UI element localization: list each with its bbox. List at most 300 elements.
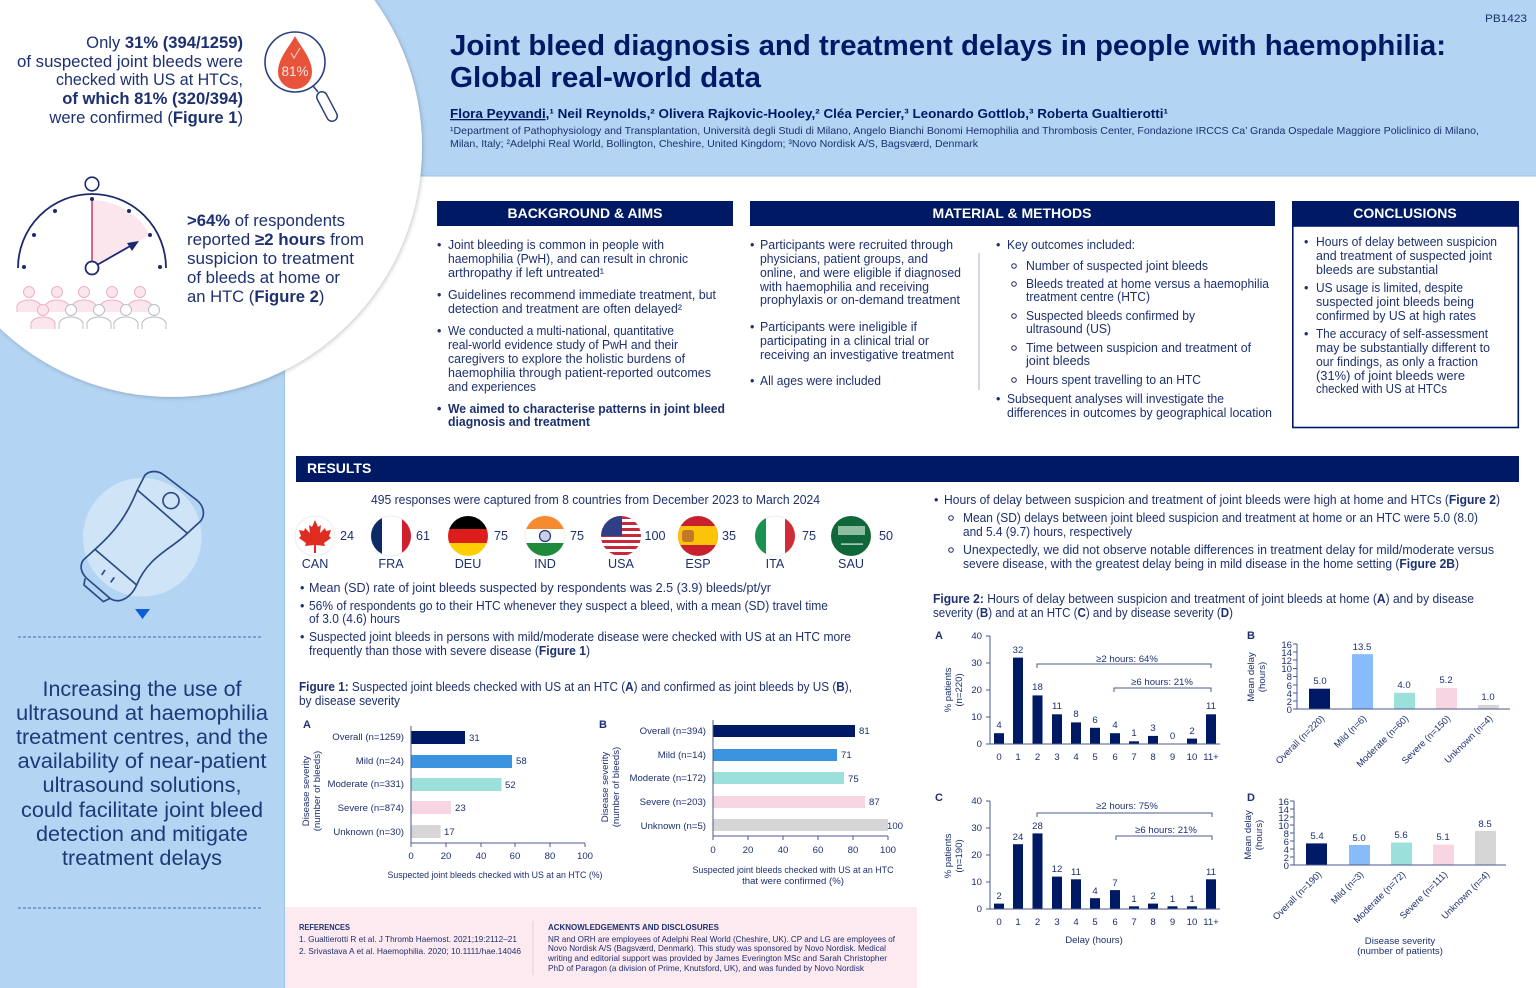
chart: figure 2C histogram: 12 — [1052, 864, 1062, 875]
chart: figure 2A histogram: 11 — [1206, 701, 1216, 712]
chart: figure 2B mean delay: Severe (n=150) — [1400, 713, 1452, 766]
bullet list: • — [437, 288, 441, 302]
chart: figure 2B mean delay: 4 — [1287, 689, 1293, 700]
chart: figure 2C histogram: 5 — [1092, 917, 1098, 928]
text: delay finding: of bleeds at home or — [187, 268, 340, 287]
conclusion bullets: Hours of delay between suspicion — [1316, 235, 1497, 249]
panel: left blue sidebar — [0, 0, 285, 988]
text: right column results bullets: • — [934, 493, 938, 507]
conclusion bullets: bleeds are substantial — [1316, 263, 1438, 277]
chart: figure 2B mean delay: B — [1247, 630, 1255, 642]
outcomes list: • — [996, 392, 1000, 406]
chart: figure 1B bars — [599, 719, 903, 887]
results bullets: Mean (SD) rate of joint bleeds suspected by respondents was 2.5 (3.9) bleeds/pt/yr — [309, 581, 771, 595]
chart: figure 2C histogram: 10 — [1187, 917, 1197, 928]
chart: figure 1B bars: Disease severity — [600, 752, 611, 822]
outcomes list: Number of suspected joint bleeds — [1026, 259, 1208, 273]
bracket: at least 6 hours — [1114, 677, 1211, 692]
chart: figure 2C histogram: (n=190) — [954, 839, 965, 873]
chart: figure 1B bars: that were confirmed (%) — [742, 876, 844, 887]
results bullets: Suspected joint bleeds in persons with mild/moderate disease were checked with US at an HTC more — [309, 630, 851, 644]
chart: figure 2A histogram: 18 — [1032, 682, 1043, 693]
chart: figure 2C histogram: 8 — [1150, 917, 1156, 928]
text: right column results bullets: and 5.4 (9.7) hours, respectively — [963, 525, 1133, 539]
text: delay finding: >64% of respondents — [187, 211, 345, 230]
conclusion bullets: • — [1304, 235, 1308, 249]
outcomes list: differences in outcomes by geographical location — [1007, 406, 1272, 420]
chart: figure 2B mean delay: (hours) — [1257, 662, 1268, 692]
heading: MATERIAL & METHODS — [933, 205, 1091, 221]
chart: figure 2C histogram: 11 — [1071, 867, 1081, 878]
chart: figure 1B bars: 80 — [848, 845, 858, 856]
chart: figure 2B mean delay: Overall (n=220) — [1274, 713, 1326, 766]
figure 2 — [933, 592, 1510, 957]
outcomes list: joint bleeds — [1025, 354, 1090, 368]
chart: figure 2B mean delay: Moderate (n=60) — [1355, 713, 1410, 769]
flag: USA — [601, 516, 666, 571]
chart: figure 2D mean delay: 14 — [1278, 805, 1290, 816]
icon: clock dial — [18, 177, 166, 274]
results bullets: 56% of respondents go to their HTC whenever they suspect a bleed, with a mean (SD) travel time — [309, 599, 828, 613]
chart: figure 1A bars: 80 — [545, 851, 555, 862]
acknowledgements: ACKNOWLEDGEMENTS AND DISCLOSURES — [548, 922, 719, 932]
results bullets: • — [300, 630, 304, 644]
chart: figure 2D mean delay: Mean delay — [1243, 810, 1254, 860]
icon: magnifier with blood drop — [265, 32, 332, 116]
chart: figure 1B bars: 60 — [813, 845, 823, 856]
participants list: with haemophilia and receiving — [759, 280, 929, 294]
chart: figure 1B bars: 40 — [778, 845, 788, 856]
chart: figure 1A bars: Disease severity — [301, 756, 312, 826]
panel: header banner — [285, 0, 1536, 176]
chart: figure 2B mean delay: 14 — [1281, 648, 1293, 659]
chart: figure 2C histogram: Delay (hours) — [1065, 935, 1123, 946]
conclusion bullets: and treatment of suspected joint — [1316, 249, 1492, 263]
text: ultrasound call to action — [16, 677, 268, 870]
chart: figure 2B mean delay: 2 — [1287, 697, 1292, 708]
chart: figure 2B mean delay: 1.0 — [1481, 692, 1495, 703]
caption — [299, 680, 852, 708]
chart: figure 1B bars: 100 — [887, 821, 903, 832]
title: Joint bleed diagnosis and treatment delays in people with haemophilia: — [450, 30, 1446, 62]
chart: figure 1A bars: A — [303, 719, 311, 731]
chart: figure 2B mean delay: 12 — [1281, 656, 1292, 667]
caption — [933, 592, 1474, 620]
chart: figure 1B bars: 87 — [869, 797, 880, 808]
text: delay finding: suspicion to treatment — [187, 249, 354, 268]
icon: group of people, two thirds highlighted — [17, 286, 166, 329]
chart: figure 2B mean delay: Mild (n=6) — [1332, 713, 1368, 750]
chart: figure 2C histogram: 2 — [1035, 917, 1040, 928]
flag: Saudi Arabia — [831, 516, 893, 571]
flag: Saudi Arabia: SAU — [838, 557, 864, 571]
title: Global real-world data — [450, 62, 762, 94]
chart: figure 2A histogram: 8 — [1150, 752, 1156, 763]
bracket: at least 6 hours — [1116, 825, 1212, 840]
chart: figure 2A histogram: 0 — [977, 739, 982, 750]
acknowledgements: PhD of Paragon (a division of Prime, Knutsford, UK), and was funded by Novo Nordisk — [548, 963, 865, 973]
chart: figure 2A histogram: A — [935, 630, 943, 642]
chart: figure 2C histogram: 1 — [1170, 894, 1175, 905]
outcomes list: Key outcomes included: — [1007, 238, 1135, 252]
bullet list: arthropathy if left untreated¹ — [448, 266, 604, 280]
chart: figure 1B bars: Severe (n=203) — [640, 797, 706, 808]
title — [450, 30, 1446, 94]
flag: Germany — [448, 516, 508, 571]
chart: figure 1B bars: Suspected joint bleeds checked with US at an HTC — [692, 865, 894, 876]
flag: India: 75 — [570, 529, 584, 543]
chart: figure 2D mean delay: Mild (n=3) — [1329, 869, 1365, 906]
text: ultrasound call to action: treatment centres, and the — [16, 725, 268, 749]
participants list: prophylaxis or on-demand treatment — [760, 293, 960, 307]
chart: figure 2B mean delay: 6 — [1287, 681, 1292, 692]
bullet list: • — [437, 324, 441, 338]
chart: figure 2C histogram: 20 — [971, 850, 982, 861]
bullet list: Guidelines recommend immediate treatment, but — [448, 288, 716, 302]
flag: Canada: 24 — [340, 529, 354, 543]
chart: figure 2A histogram: 2 — [1189, 726, 1195, 737]
text: ultrasound finding: of which 81% (320/394) — [62, 89, 243, 108]
bullet list: caregivers to explore the holistic burdens of — [448, 352, 685, 366]
chart: figure 2A histogram: 8 — [1073, 709, 1079, 720]
flag: France — [371, 516, 430, 571]
chart: figure 2C histogram: 10 — [971, 877, 982, 888]
chart: figure 2A histogram: 4 — [996, 720, 1002, 731]
chart: figure 1B bars: 100 — [880, 845, 896, 856]
bullet list: We conducted a multi-national, quantitative — [448, 324, 674, 338]
participants list: receiving an investigative treatment — [760, 348, 954, 362]
chart: figure 1B bars: (number of bleeds) — [611, 747, 622, 827]
chart: figure 1A bars: Suspected joint bleeds checked with US at an HTC (%) — [388, 870, 602, 881]
icon: downward arrow — [135, 609, 150, 619]
chart: figure 1A bars: Unknown (n=30) — [333, 827, 404, 838]
flag: Italy — [755, 516, 816, 571]
chart: figure 2A histogram: 3 — [1150, 723, 1156, 734]
chart: figure 2D mean delay: 8 — [1284, 829, 1289, 840]
chart: figure 2A histogram: 0 — [1170, 731, 1175, 742]
flag: USA: USA — [608, 557, 635, 571]
chart: figure 1B bars: Moderate (n=172) — [629, 773, 706, 784]
chart: figure 1B bars: 75 — [848, 774, 859, 785]
bracket: at least 2 hours: ≥2 hours: 75% — [1096, 801, 1158, 812]
chart: figure 2A histogram: 7 — [1131, 752, 1137, 763]
chart: figure 1A bars: 52 — [505, 780, 516, 791]
icon: ultrasound probe — [81, 471, 203, 602]
panel: material and methods — [750, 201, 1275, 420]
acknowledgements: writing and editorial support was provided by James Everington MSc and Sarah Christopher — [547, 953, 887, 963]
chart: figure 2D mean delay: 12 — [1278, 813, 1289, 824]
chart: figure 2D mean delay: Severe (n=111) — [1398, 869, 1449, 921]
results bullets: • — [300, 599, 304, 613]
participants list: Participants were recruited through — [760, 238, 953, 252]
chart: figure 1B bars: 81 — [859, 726, 870, 737]
text: right column results bullets — [934, 493, 1500, 571]
text: ultrasound finding: of suspected joint bleeds were — [17, 52, 243, 71]
chart: figure 2A histogram: 1 — [1131, 728, 1137, 739]
bracket: at least 2 hours — [1037, 801, 1212, 817]
chart: figure 2B mean delay: 16 — [1281, 640, 1292, 651]
outcomes list: Suspected bleeds confirmed by — [1026, 309, 1196, 323]
chart: figure 2C histogram: 3 — [1054, 917, 1060, 928]
chart: figure 2C histogram: 9 — [1170, 917, 1175, 928]
chart: figure 2A histogram: (n=220) — [954, 673, 965, 707]
references — [299, 922, 521, 956]
caption: Figure 2: Hours of delay between suspicion and treatment of joint bleeds at home (A) and by disease — [933, 592, 1474, 606]
panel: references and acknowledgements — [285, 907, 917, 988]
chart: figure 2C histogram: 1 — [1015, 917, 1021, 928]
caption: severity (B) and at an HTC (C) and by disease severity (D) — [933, 606, 1233, 620]
chart: figure 2A histogram: 9 — [1170, 752, 1175, 763]
chart: figure 2C histogram: 11+ — [1203, 917, 1219, 928]
bullet list: and experiences — [448, 380, 536, 394]
bullet list: detection and treatment are often delayed² — [448, 302, 682, 316]
chart: figure 2A histogram: % patients — [943, 667, 954, 712]
chart: figure 1A bars — [301, 719, 602, 881]
chart: figure 2D mean delay: 16 — [1278, 797, 1289, 808]
chart: figure 2A histogram: 11 — [1052, 701, 1062, 712]
chart: figure 1A bars: 17 — [444, 827, 455, 838]
text: ultrasound call to action: ultrasound at haemophilia — [16, 701, 268, 725]
chart: figure 2A histogram: 10 — [1187, 752, 1197, 763]
chart: figure 1A bars: Severe (n=874) — [338, 803, 404, 814]
heading: BACKGROUND & AIMS — [507, 205, 663, 221]
heading: CONCLUSIONS — [1353, 205, 1457, 221]
chart: figure 2D mean delay: (number of patients) — [1357, 946, 1443, 957]
chart: figure 2A histogram: 30 — [971, 658, 982, 669]
flag: Italy: 75 — [802, 529, 816, 543]
participants list: • — [750, 320, 754, 334]
conclusion bullets: checked with US at HTCs — [1316, 382, 1447, 396]
results heading: RESULTS — [307, 460, 371, 476]
chart: figure 2A histogram: 3 — [1054, 752, 1060, 763]
bullet list: haemophilia (PwH), and can result in chronic — [448, 252, 688, 266]
outcomes list: Bleeds treated at home versus a haemophilia — [1026, 277, 1269, 291]
outcomes list: treatment centre (HTC) — [1026, 290, 1150, 304]
chart: figure 2C histogram: 2 — [1150, 891, 1156, 902]
flag: France: FRA — [378, 557, 404, 571]
panel: response summary and country flags — [295, 493, 893, 658]
outcomes list: ultrasound (US) — [1026, 322, 1111, 336]
text: ultrasound finding: checked with US at HTCs, — [56, 70, 243, 89]
flag: Spain: 35 — [722, 529, 736, 543]
participants list: online, and were eligible if diagnosed — [760, 266, 961, 280]
conclusion bullets: suspected joint bleeds being — [1316, 295, 1474, 309]
acknowledgements: NR and ORH are employees of Adelphi Real World (Cheshire, UK). CP and LG are employees of — [548, 934, 896, 944]
chart: figure 2C histogram: 7 — [1131, 917, 1137, 928]
bullet list: We aimed to characterise patterns in joint bleed — [448, 402, 725, 416]
chart: figure 2A histogram: 32 — [1013, 645, 1023, 656]
icon: magnifier with blood drop: 81% — [281, 64, 309, 79]
text: ultrasound call to action: could facilitate joint bleed — [21, 798, 263, 822]
chart: figure 2C histogram: 4 — [1092, 886, 1098, 897]
chart: figure 1A bars: 0 — [408, 851, 414, 862]
chart: figure 2C histogram: 6 — [1112, 917, 1118, 928]
outcomes list — [996, 238, 1272, 420]
chart: figure 2A histogram: 5 — [1092, 752, 1098, 763]
chart: figure 1B bars: 20 — [743, 845, 753, 856]
chart: figure 2C histogram — [935, 792, 1220, 946]
chart: figure 2C histogram: 1 — [1131, 894, 1137, 905]
bullet list: haemophilia through patient-reported outcomes — [448, 366, 711, 380]
affiliations — [450, 126, 1479, 150]
bracket: at least 6 hours: ≥6 hours: 21% — [1135, 825, 1197, 836]
chart: figure 2C histogram: 30 — [971, 823, 982, 834]
text: delay finding — [187, 211, 364, 306]
chart: figure 2C histogram: 7 — [1112, 878, 1118, 889]
flag: Germany: DEU — [455, 557, 481, 571]
chart: figure 1A bars: 23 — [455, 803, 466, 814]
chart: figure 2D mean delay: 4 — [1284, 845, 1290, 856]
chart: figure 2D mean delay: 2 — [1284, 853, 1289, 864]
chart: figure 2C histogram: 2 — [996, 891, 1002, 902]
conclusion bullets: (31%) of joint bleeds were — [1316, 369, 1465, 383]
chart: figure 1A bars: Mild (n=24) — [356, 756, 404, 767]
chart: figure 1B bars: 0 — [710, 845, 716, 856]
chart: figure 2C histogram: % patients — [943, 833, 954, 878]
chart: figure 2B mean delay: 5.0 — [1313, 676, 1327, 687]
chart: figure 1B bars: Mild (n=14) — [658, 750, 706, 761]
chart: figure 2C histogram: 0 — [977, 904, 982, 915]
chart: figure 2A histogram: 20 — [971, 685, 982, 696]
chart: figure 2D mean delay — [1243, 792, 1506, 957]
affiliations: ¹Department of Pathophysiology and Transplantation, Università degli Studi di Milano, Angelo Bianchi Bonomi Hemophilia and Thrombosis Center, Fondazione IRCCS Ca’ Granda Ospedale Maggiore Policlinico di Milano, — [450, 126, 1479, 137]
outcomes list: Subsequent analyses will investigate the — [1007, 392, 1224, 406]
chart: figure 2D mean delay: (hours) — [1254, 820, 1265, 850]
flag: Italy: ITA — [766, 557, 785, 571]
references: REFERENCES — [299, 922, 350, 932]
chart: figure 2D mean delay: 5.6 — [1394, 830, 1408, 841]
chart: figure 2D mean delay: 5.0 — [1352, 833, 1366, 844]
participants list: Participants were ineligible if — [760, 320, 917, 334]
bracket: at least 2 hours: ≥2 hours: 64% — [1096, 654, 1158, 665]
flag: Germany: 75 — [494, 529, 508, 543]
bullet list: • — [437, 402, 441, 416]
chart: figure 2C histogram: C — [935, 792, 943, 804]
chart: figure 2B mean delay: 4.0 — [1397, 680, 1411, 691]
chart: figure 2C histogram: 11 — [1206, 867, 1216, 878]
chart: figure 1A bars: 100 — [577, 851, 593, 862]
chart: figure 2D mean delay: Unknown (n=4) — [1440, 869, 1491, 921]
conclusion bullets: confirmed by US at high rates — [1316, 309, 1476, 323]
text: delay finding: an HTC (Figure 2) — [187, 287, 324, 306]
panel: background and aims — [437, 201, 733, 429]
bracket: at least 2 hours — [1037, 654, 1211, 668]
text: right column results bullets: Mean (SD) delays between joint bleed suspicion and treatment at home or an HTC were 5.0 (8.0) — [963, 511, 1478, 525]
panel: white key findings circle — [0, 0, 422, 397]
bullet list: • — [437, 238, 441, 252]
chart: figure 1A bars: 58 — [516, 756, 527, 767]
text: ultrasound call to action: detection and mitigate — [36, 822, 248, 846]
chart: figure 2C histogram: 1 — [1189, 894, 1195, 905]
affiliations: Milan, Italy; ²Adelphi Real World, Bollington, Cheshire, United Kingdom; ³Novo Nordisk A/S, Bagsværd, Denmark — [450, 139, 979, 150]
flag: Spain: ESP — [685, 557, 711, 571]
text: ultrasound finding: Only 31% (394/1259) — [86, 33, 243, 52]
conclusion bullets: our findings, as only a fraction — [1316, 355, 1478, 369]
chart: figure 2D mean delay: Overall (n=190) — [1271, 869, 1323, 922]
chart: figure 2A histogram — [935, 630, 1220, 763]
acknowledgements — [547, 922, 896, 973]
chart: figure 2C histogram: 24 — [1013, 832, 1024, 843]
chart: figure 2D mean delay: 10 — [1278, 821, 1289, 832]
text: ultrasound call to action: availability of near-patient — [18, 749, 267, 773]
conclusion bullets: • — [1304, 281, 1308, 295]
panel: conclusions — [1292, 201, 1519, 428]
flag: India — [525, 516, 584, 571]
text: right column results bullets: Unexpectedly, we did not observe notable differences in treatment delay for mild/moderate versus — [963, 543, 1494, 557]
participants list: All ages were included — [760, 374, 881, 388]
chart: figure 2A histogram: 6 — [1092, 715, 1098, 726]
chart: figure 1A bars: 40 — [476, 851, 486, 862]
heading — [750, 201, 1275, 226]
caption: by disease severity — [299, 694, 401, 708]
participants list: • — [750, 374, 754, 388]
chart: figure 2B mean delay: 10 — [1281, 664, 1292, 675]
heading — [437, 201, 733, 226]
references: 2. Srivastava A et al. Haemophilia. 2020; 10.1111/hae.14046 — [299, 946, 521, 956]
references: 1. Gualtierotti R et al. J Thromb Haemost. 2021;19:2112–21 — [299, 934, 517, 944]
flag: France: 61 — [416, 529, 430, 543]
chart: figure 1B bars: B — [599, 719, 607, 731]
chart: figure 1B bars: 71 — [841, 750, 852, 761]
bullet list: real-world evidence study of PwH and their — [448, 338, 678, 352]
heading — [1292, 201, 1519, 226]
poster code: PB1423 — [1485, 13, 1527, 25]
outcomes list: Hours spent travelling to an HTC — [1026, 373, 1201, 387]
chart: figure 2D mean delay: D — [1247, 792, 1255, 804]
chart: figure 2B mean delay — [1246, 630, 1510, 769]
chart: figure 2D mean delay: 0 — [1284, 861, 1289, 872]
chart: figure 2A histogram: 6 — [1112, 752, 1118, 763]
flag: India: IND — [534, 557, 556, 571]
participants list — [750, 238, 961, 388]
chart: figure 2C histogram: 40 — [971, 796, 982, 807]
conclusion bullets: may be substantially different to — [1316, 341, 1490, 355]
chart: figure 1A bars: 31 — [469, 733, 480, 744]
text: ultrasound finding: were confirmed (Figure 1) — [48, 108, 243, 127]
text: ultrasound call to action: ultrasound solutions, — [42, 773, 242, 797]
results bullets: of 3.0 (4.6) hours — [309, 612, 400, 626]
acknowledgements: Novo Nordisk A/S (Bagsværd, Denmark). This study was sponsored by Novo Nordisk. Medical — [548, 943, 886, 953]
chart: figure 2B mean delay: 13.5 — [1353, 642, 1371, 653]
chart: figure 2A histogram: 4 — [1112, 720, 1118, 731]
chart: figure 2D mean delay: Disease severity — [1365, 936, 1435, 947]
chart: figure 2D mean delay: 5.1 — [1436, 832, 1450, 843]
chart: figure 2D mean delay: 5.4 — [1310, 831, 1324, 842]
chart: figure 1B bars: Unknown (n=5) — [641, 821, 706, 832]
outcomes list: • — [996, 238, 1000, 252]
text: ultrasound call to action: treatment delays — [62, 846, 222, 870]
flag: Spain — [678, 516, 736, 571]
outcomes list: Time between suspicion and treatment of — [1026, 341, 1251, 355]
figure 1 — [299, 680, 903, 887]
chart: figure 2B mean delay: 0 — [1287, 705, 1292, 716]
chart: figure 2D mean delay: 6 — [1284, 837, 1289, 848]
chart: figure 2A histogram: 4 — [1073, 752, 1079, 763]
conclusion bullets: US usage is limited, despite — [1316, 281, 1463, 295]
chart: figure 2B mean delay: 8 — [1287, 672, 1292, 683]
chart: figure 1A bars: (number of bleeds) — [312, 751, 323, 831]
chart: figure 1B bars: Overall (n=394) — [640, 726, 706, 737]
chart: figure 2D mean delay: 8.5 — [1478, 819, 1492, 830]
results bullets — [300, 581, 851, 658]
chart: figure 2A histogram: 40 — [971, 631, 982, 642]
chart: figure 2A histogram: 0 — [996, 752, 1002, 763]
flag: Canada: CAN — [302, 557, 328, 571]
chart: figure 2D mean delay: Moderate (n=72) — [1352, 869, 1407, 925]
chart: figure 1A bars: 60 — [510, 851, 520, 862]
text: delay finding: reported ≥2 hours from — [187, 230, 364, 249]
participants list: physicians, patient groups, and — [760, 252, 928, 266]
